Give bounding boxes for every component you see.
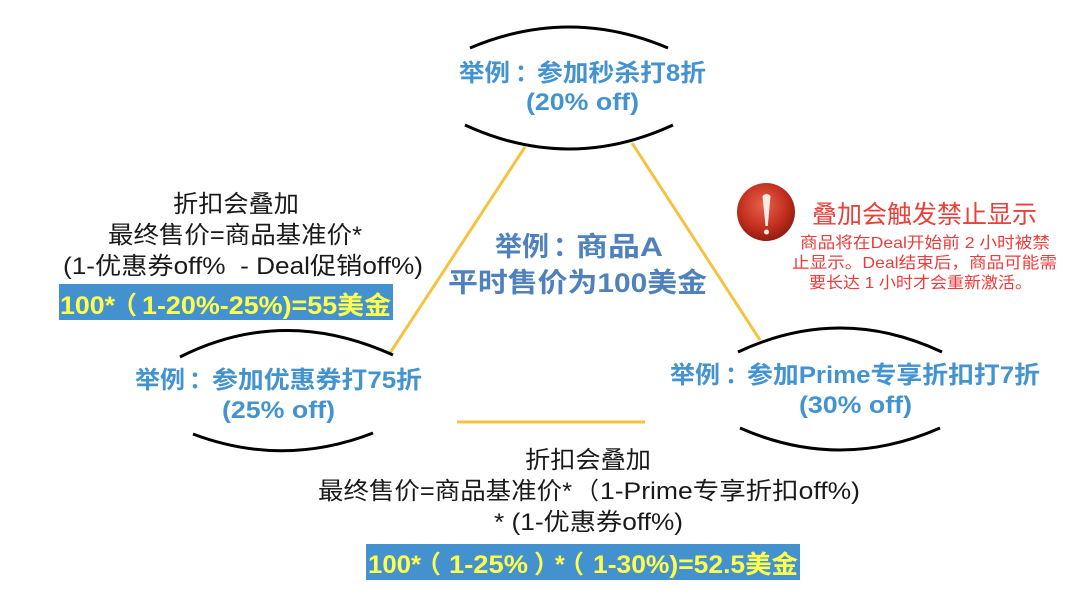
bottom result text: 1-25%	[449, 551, 528, 579]
bottom result text: 100*	[368, 551, 421, 579]
bottom result text: 1-30%)=52.5美金	[593, 551, 798, 579]
bottom result text	[368, 551, 798, 579]
left formula line 1: 最终售价=商品基准价*	[108, 222, 362, 249]
left formula heading: 折扣会叠加	[173, 191, 299, 218]
line: top to left	[390, 147, 525, 353]
node: prime discount	[670, 328, 1040, 450]
left result text: 100*	[60, 292, 115, 320]
left result text: （	[112, 292, 137, 320]
triangle connector lines	[390, 143, 760, 422]
warning text line 2: 止显示。Deal结束后，商品可能需	[792, 254, 1057, 272]
top node brackets	[465, 27, 673, 149]
bottom formula line 1: 1-Prime专享折扣off%)	[600, 478, 860, 505]
bottom formula line 1: 最终售价=商品基准价*	[318, 478, 572, 505]
left result text	[60, 292, 391, 320]
bottom formula line 1: （	[575, 478, 599, 505]
left node discount: (25% off)	[222, 397, 335, 424]
left node title: 举例	[135, 367, 185, 394]
warning text line 3: 要长达 1 小时才会重新激活。	[809, 274, 1032, 292]
right node brackets	[738, 328, 942, 450]
bottom formula line 2: * (1-优惠券off%)	[494, 509, 683, 536]
right node title: 参加Prime专享折扣打7折	[747, 361, 1040, 389]
left node title: 参加优惠券打75折	[212, 366, 422, 394]
left node title: ：	[189, 367, 213, 394]
left result band	[59, 284, 393, 320]
bottom formula line 1	[318, 478, 860, 505]
bottom result text: *	[555, 551, 565, 579]
warning block	[737, 183, 1057, 292]
top node title	[459, 59, 706, 87]
center line 1: 商品A	[576, 232, 663, 262]
left result text: 1-20%-25%)=55美金	[142, 292, 391, 320]
top node title: 举例	[459, 60, 510, 87]
left node title	[135, 366, 422, 394]
node: flash sale	[459, 27, 706, 149]
right node title: 举例	[670, 362, 720, 389]
top node title: 参加秒杀打8折	[537, 59, 706, 87]
center text: product A	[448, 232, 707, 298]
bottom result text: （	[559, 551, 584, 579]
line: left to right	[457, 420, 645, 424]
right node title: ：	[725, 362, 749, 389]
center line 1: ：	[553, 232, 580, 262]
bottom formula block	[318, 447, 860, 580]
bottom result text: （	[416, 551, 441, 579]
top node discount: (20% off)	[526, 89, 639, 116]
center line 1	[495, 232, 663, 262]
left formula line 2: (1-优惠券off% - Deal促销off%)	[63, 253, 423, 280]
icon: red exclamation ball	[737, 183, 795, 241]
center line 1: 举例	[495, 232, 549, 262]
bottom result text: ）	[534, 551, 559, 579]
node: coupon	[135, 330, 422, 451]
top node title: ：	[515, 60, 539, 87]
right node discount: (30% off)	[799, 392, 912, 419]
left node brackets	[180, 330, 393, 451]
warning text line 1: 商品将在Deal开始前 2 小时被禁	[800, 234, 1050, 252]
left formula block	[59, 191, 423, 320]
line: top to right	[632, 143, 760, 340]
bottom formula heading: 折扣会叠加	[525, 447, 651, 474]
bottom result band	[366, 544, 800, 580]
center line 2: 平时售价为100美金	[448, 268, 707, 298]
warning heading: 叠加会触发禁止显示	[812, 201, 1037, 229]
